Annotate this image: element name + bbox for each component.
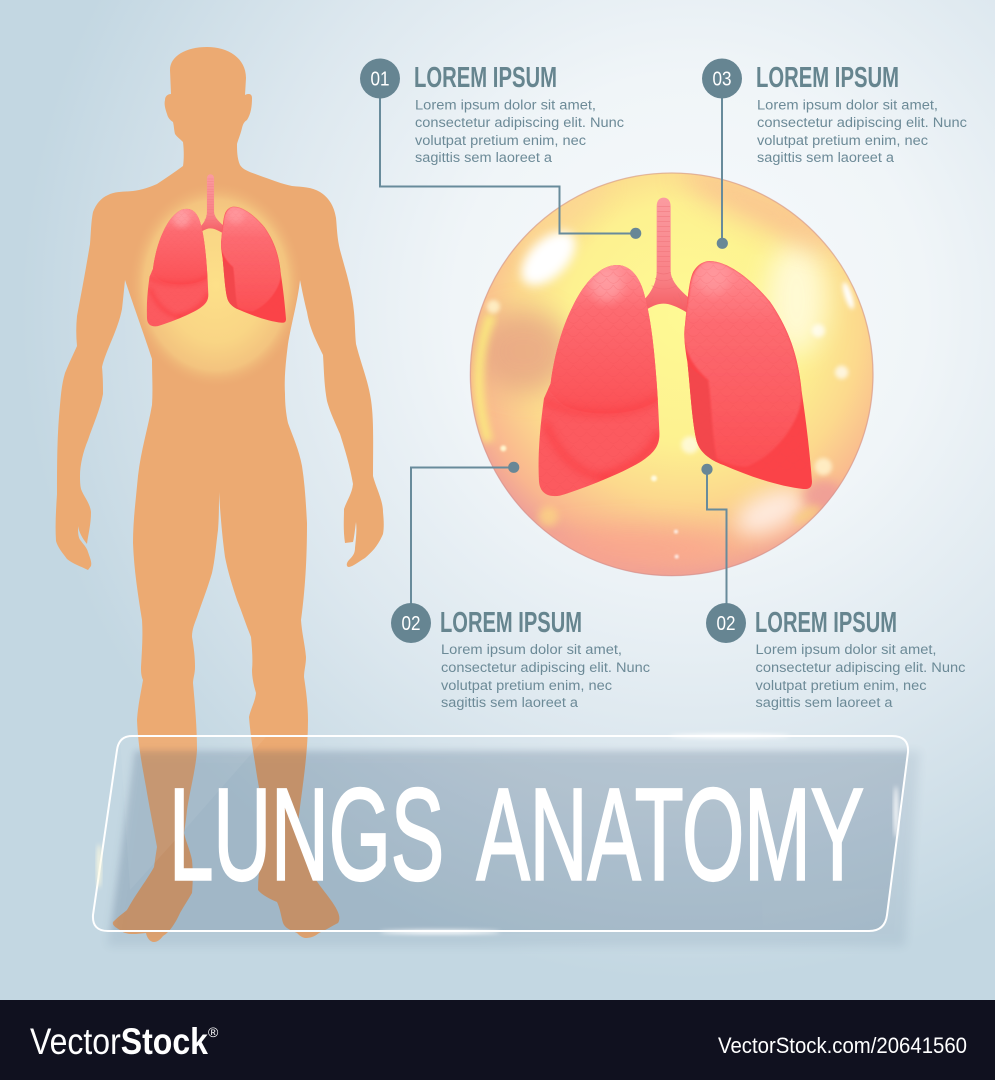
callout 02 right: Lorem ipsum dolor sit amet,: [756, 642, 936, 657]
callout 01: volutpat pretium enim, nec: [415, 133, 586, 148]
callout 02 left: LOREM IPSUM: [440, 607, 582, 639]
footer bar: [0, 1000, 995, 1080]
connector dots: [508, 228, 728, 475]
connector 03: [721, 96, 723, 243]
callout 03: Lorem ipsum dolor sit amet,: [757, 98, 938, 112]
callout 01: LOREM IPSUM: [414, 62, 557, 94]
connector 02 left: [411, 468, 514, 605]
callout 01: Lorem ipsum dolor sit amet,: [415, 98, 596, 112]
callout 03: [702, 58, 967, 165]
callout 02 left: Lorem ipsum dolor sit amet,: [441, 642, 622, 657]
callout 02 right: [706, 603, 966, 710]
registered mark: ®: [208, 1024, 219, 1040]
callout 03: LOREM IPSUM: [756, 62, 899, 94]
watermark url: VectorStock.com/20641560: [718, 1033, 967, 1058]
callout 01: sagittis sem laoreet a: [415, 150, 553, 165]
callout 02 left: sagittis sem laoreet a: [441, 695, 579, 710]
callout 02 left: consectetur adipiscing elit. Nunc: [441, 660, 650, 675]
callout 02 right: volutpat pretium enim, nec: [756, 678, 927, 693]
callout 01: 01: [370, 68, 390, 90]
callout 02 right: sagittis sem laoreet a: [756, 695, 893, 710]
watermark logo: VectorStock: [30, 1021, 208, 1062]
callout 01: consectetur adipiscing elit. Nunc: [415, 115, 624, 130]
callout 01: [360, 58, 624, 165]
callout 02 left: volutpat pretium enim, nec: [441, 678, 612, 693]
callout 02 left: 02: [402, 613, 420, 635]
connector 02 right: [707, 469, 726, 605]
connector 01: [380, 96, 635, 234]
callout 03: consectetur adipiscing elit. Nunc: [757, 115, 967, 130]
callout 02 left: [391, 603, 650, 710]
callout 02 right: LOREM IPSUM: [755, 607, 897, 639]
glass title panel: [93, 734, 920, 960]
human body silhouette: [56, 47, 384, 942]
callout 02 right: consectetur adipiscing elit. Nunc: [756, 660, 966, 675]
callout 02 right: 02: [716, 613, 736, 635]
magnified lungs bubble: [470, 157, 873, 576]
connector lines: [380, 96, 726, 605]
callout 03: sagittis sem laoreet a: [757, 150, 895, 165]
small lungs on body: [144, 174, 288, 329]
chest glow: [137, 192, 295, 378]
callout 03: volutpat pretium enim, nec: [757, 133, 928, 148]
callout 03: 03: [712, 68, 732, 90]
